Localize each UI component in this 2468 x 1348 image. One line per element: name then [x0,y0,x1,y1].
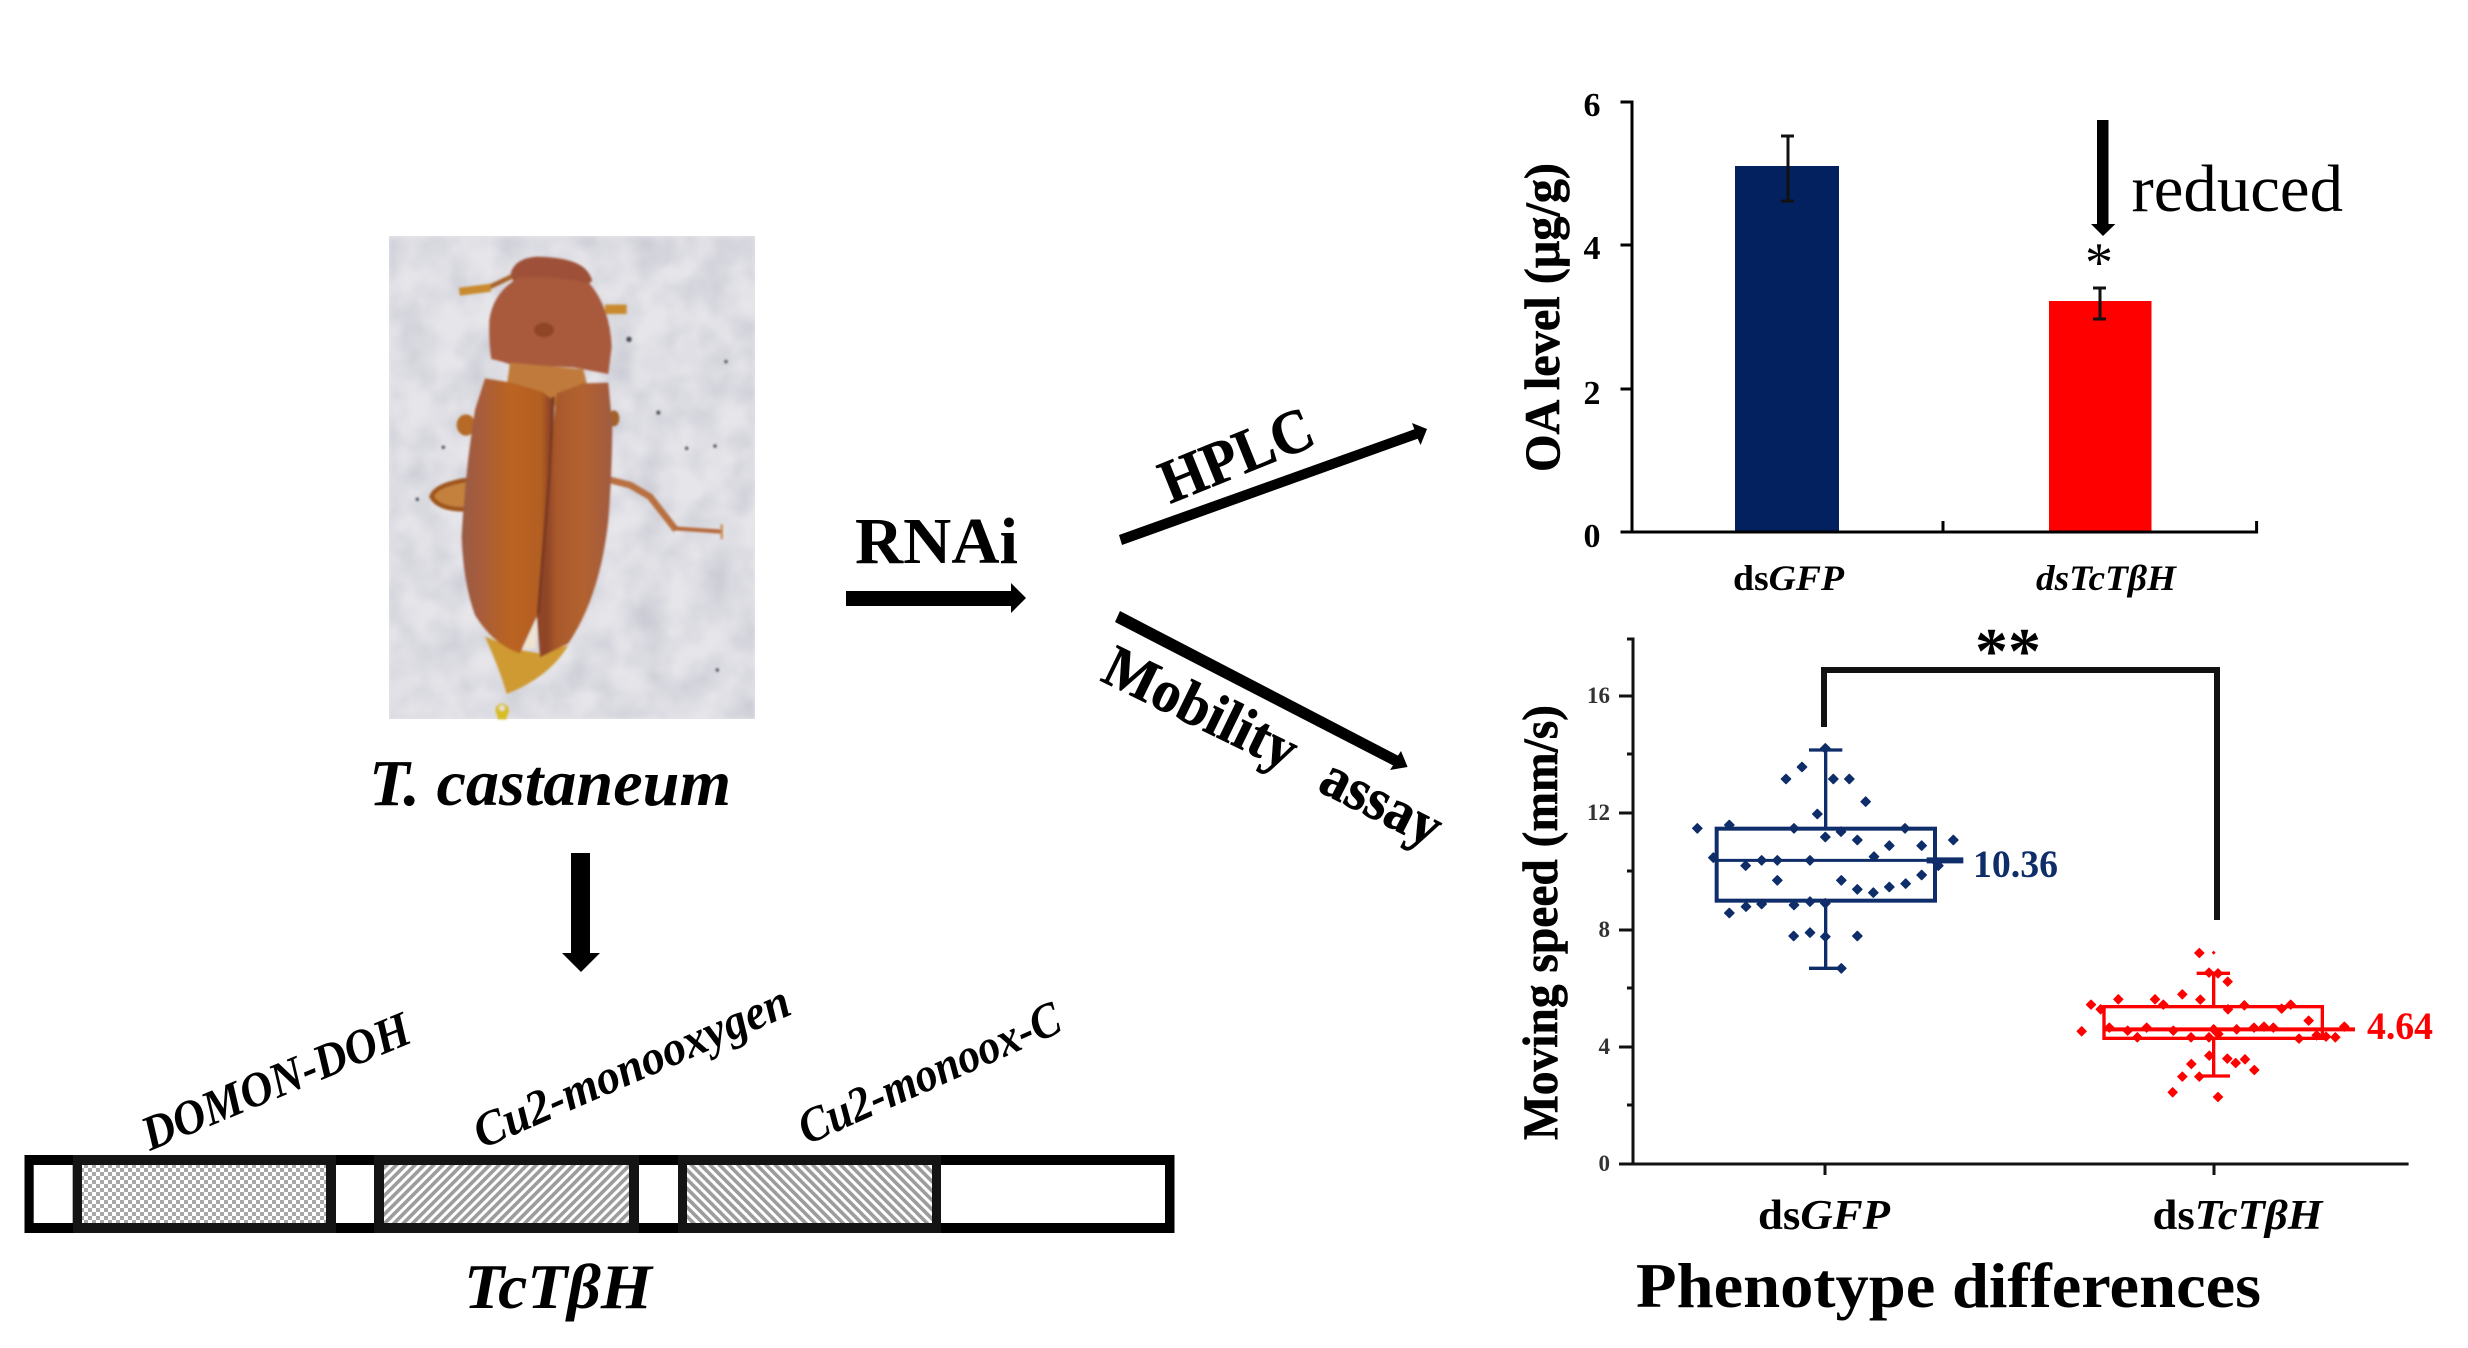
x label: dsTcTβH: dsTcTβH [2152,1193,2324,1239]
y tick labels: 4 [1584,230,1600,267]
gene domain diagram [24,1155,1174,1233]
species name: T. castaneum [369,747,731,820]
box and dots: dsTcTβH [2077,948,2355,1102]
significance star: * [2085,232,2113,294]
Mobility assay label [1093,632,1454,860]
Mobility assay label: Mobility [1093,632,1309,783]
box and dots: dsGFP [1693,744,1963,973]
domain label: Cu2-monooxygen: Cu2-monooxygen [464,973,798,1159]
x label: dsTcTβH: dsTcTβH [2036,558,2177,598]
domain: DOMON-DOH [82,1165,326,1223]
bar chart: OA level [1514,87,2343,598]
axes [1619,639,2409,1175]
domain: Cu2-monooxygen [384,1165,629,1223]
arrow: RNAi [846,583,1026,613]
significance bracket [1824,670,2217,920]
HPLC label: HPLC [1150,394,1324,517]
bar: dsGFP [1735,166,1839,532]
x label: dsGFP: dsGFP [1733,558,1845,598]
reduced label: reduced [2132,152,2343,226]
arrow: Mobility assay [1115,611,1408,770]
caption: Phenotype differences: Phenotype differences [1636,1250,2261,1321]
y tick labels: 8 [1598,917,1610,942]
significance stars: ** [1975,615,2041,688]
RNAi label: RNAi [855,505,1018,578]
y axis title: Moving speed (mm/s) [1512,705,1568,1140]
Mobility assay label: assay [1310,743,1454,860]
arrow: beetle to gene [562,853,600,972]
box plot: moving speed [1512,615,2433,1239]
y tick labels [1587,683,1610,1176]
y tick labels: 12 [1587,800,1610,825]
arrow: HPLC [1119,423,1427,545]
arrow: reduced [2091,120,2115,236]
y tick labels: 0 [1584,518,1600,555]
y tick labels: 2 [1584,375,1600,412]
bar: dsTcTβH [2049,301,2152,532]
gene name: TcTβH [464,1251,654,1322]
y tick labels: 16 [1587,683,1610,708]
domain: Cu2-monoox-C [687,1165,932,1223]
axes [1620,102,2257,532]
domain label: DOMON-DOH: DOMON-DOH [132,1000,420,1162]
x label: dsGFP: dsGFP [1758,1193,1890,1239]
y tick labels: 0 [1598,1151,1610,1176]
y tick labels: 6 [1584,87,1600,124]
y tick labels: 4 [1598,1034,1610,1059]
value label: 10.36: 10.36 [1973,843,2058,886]
error bar: dsTcTβH [2093,288,2106,319]
value label: 4.64: 4.64 [2367,1005,2433,1048]
error bar: dsGFP [1781,136,1794,201]
photo: T. castaneum beetle [389,236,755,719]
domain label: Cu2-monoox-C: Cu2-monoox-C [789,990,1070,1155]
y axis title: OA level (μg/g) [1514,163,1570,472]
y tick labels [1584,87,1600,555]
